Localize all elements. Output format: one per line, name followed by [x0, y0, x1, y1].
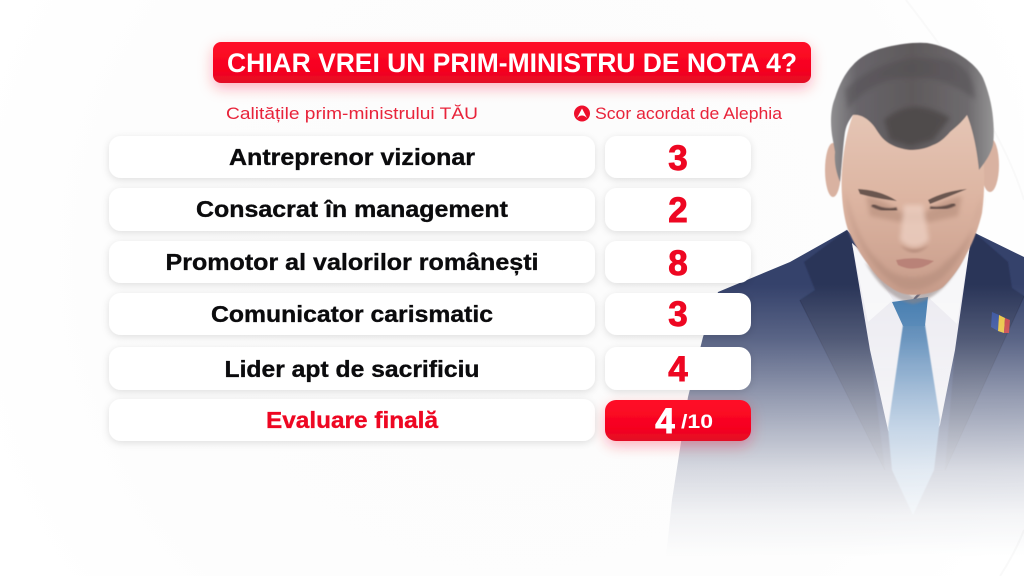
- score: 4: [605, 347, 751, 390]
- row: Evaluare finală: [109, 399, 595, 441]
- score: 3: [605, 136, 751, 178]
- score: 4: 4: [668, 350, 688, 389]
- flag pin: [991, 312, 1010, 333]
- row: Promotor al valorilor românești: [109, 241, 595, 283]
- portrait: man with bowed head: [670, 230, 1024, 526]
- jacket lapels: [800, 230, 1024, 444]
- jacket: [670, 230, 1024, 526]
- row: Comunicator carismatic: [109, 293, 595, 335]
- head: [825, 43, 999, 295]
- mouth: [896, 258, 934, 269]
- row: Lider apt de sacrificiu: [109, 347, 595, 390]
- score: 8: 8: [668, 244, 688, 283]
- hair dark tuft: [884, 107, 950, 146]
- score: 2: [605, 188, 751, 231]
- eyes: [872, 205, 897, 210]
- nose: [900, 205, 929, 252]
- score: 8: [605, 241, 751, 283]
- icon: Alephia logo: [574, 106, 590, 122]
- score: 3: [605, 293, 751, 335]
- row: Evaluare finală: Evaluare finală: [266, 407, 438, 433]
- row: Antreprenor vizionar: Antreprenor vizionar: [229, 144, 475, 170]
- score: 3: 3: [668, 139, 688, 178]
- under-brow shading: [866, 196, 962, 222]
- face: [842, 100, 984, 295]
- collar: [852, 243, 970, 324]
- shirt: [852, 243, 970, 431]
- final score: 4/10: /10: [681, 412, 713, 433]
- final score: 4/10: [605, 400, 751, 441]
- score: 3: 3: [668, 295, 688, 334]
- tie: [888, 297, 940, 515]
- column heading: score: Scor acordat de Alephia: [595, 104, 783, 123]
- chin shadow: [865, 263, 960, 304]
- column heading: qualities: Calitățile prim-ministrului TĂU: [226, 104, 478, 123]
- row: Antreprenor vizionar: [109, 136, 595, 178]
- row: Lider apt de sacrificiu: Lider apt de sacrificiu: [224, 356, 480, 382]
- row: Promotor al valorilor românești: Promotor al valorilor românești: [166, 249, 538, 276]
- eyebrows: [858, 189, 897, 201]
- final score: 4/10: 4: [655, 402, 675, 441]
- ears: [825, 143, 841, 197]
- row: Consacrat în management: [109, 188, 595, 231]
- score: 2: 2: [668, 191, 688, 230]
- hair: [831, 43, 994, 182]
- cheek and jaw shading: [845, 190, 982, 290]
- title banner: CHIAR VREI UN PRIM-MINISTRU DE NOTA 4?: [227, 48, 797, 78]
- row: Comunicator carismatic: Comunicator carismatic: [211, 301, 493, 327]
- row: Consacrat în management: Consacrat în management: [196, 196, 508, 222]
